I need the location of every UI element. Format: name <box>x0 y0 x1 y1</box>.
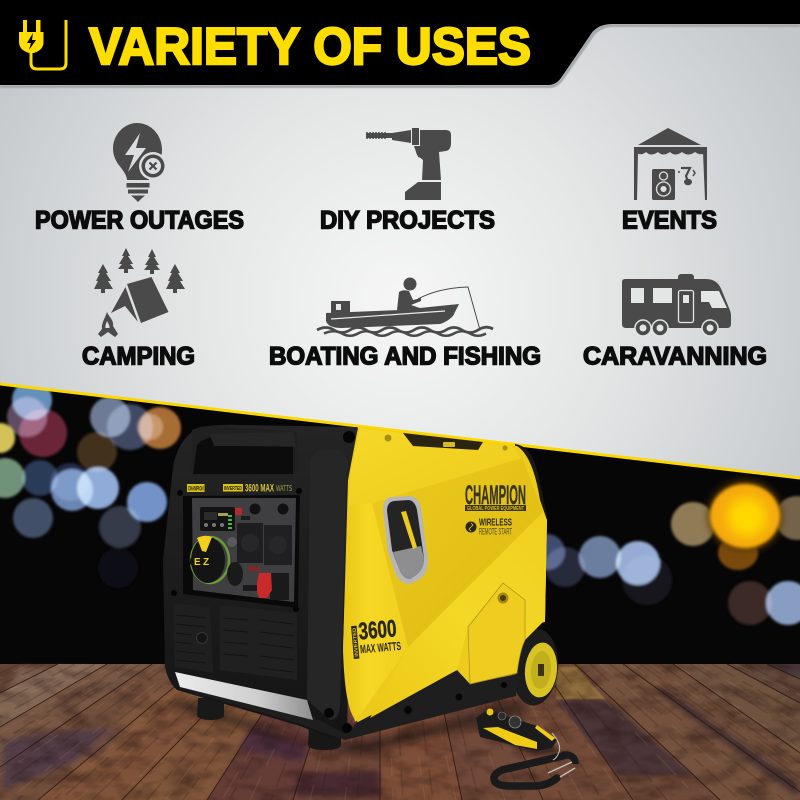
label: boating and fishing: BOATING AND FISHING <box>269 342 541 370</box>
black end housing <box>163 425 357 738</box>
silver strip <box>175 672 313 720</box>
black header banner <box>0 0 800 85</box>
wood floor <box>0 664 800 800</box>
use: power outages <box>35 123 244 234</box>
use: camping <box>82 248 195 370</box>
brand logo <box>465 480 526 512</box>
bokeh lights right <box>529 481 800 625</box>
control panel label strip: CHAMPION <box>188 486 204 492</box>
icon: light bulb with x <box>113 123 167 202</box>
feet <box>197 698 341 750</box>
side pillar <box>307 450 347 720</box>
contact shadow <box>170 695 530 756</box>
generator <box>163 425 561 756</box>
wireless badge: WIRELESS <box>479 516 512 528</box>
3600 max watts badge: MAX WATTS <box>360 639 402 656</box>
wireless remote <box>475 708 575 786</box>
remote body <box>476 708 557 751</box>
yellow body <box>343 427 547 722</box>
control panel label strip: 3600 MAX <box>245 482 274 494</box>
label: power outages: POWER OUTAGES <box>35 206 244 234</box>
access door <box>468 583 525 684</box>
icon: tent, trees and campfire <box>94 248 185 337</box>
wood grain <box>0 664 800 800</box>
base screws <box>404 682 507 714</box>
label: events: EVENTS <box>622 206 717 234</box>
3600 max watts badge <box>350 615 402 659</box>
icon: plug <box>19 20 66 69</box>
use: boating and fishing <box>269 278 541 370</box>
control panel label strip: WATTS <box>276 484 292 493</box>
remote shadow <box>475 730 560 756</box>
bokeh lights left <box>0 380 181 588</box>
icon: canopy with speaker <box>634 128 707 200</box>
icon: drill <box>366 128 451 200</box>
icon: fisherman in boat <box>317 278 493 336</box>
dark night backdrop <box>0 380 800 670</box>
lower vents <box>173 603 297 680</box>
side carry handle <box>383 496 428 584</box>
generator: CHAMPION <box>465 480 526 510</box>
rear wheel <box>509 627 561 707</box>
use: events <box>622 128 717 234</box>
label: DIY projects: DIY PROJECTS <box>320 206 495 234</box>
yellow diagonal edge <box>0 384 800 478</box>
top slot <box>403 433 483 450</box>
screws <box>171 431 355 733</box>
control panel label strip: INVERTED <box>224 486 242 492</box>
rear dark panel top <box>515 444 548 520</box>
wireless badge <box>466 516 512 536</box>
generator: REMOTE START <box>479 526 512 536</box>
control panel recess <box>183 495 300 608</box>
label: camping: CAMPING <box>82 342 195 370</box>
label: caravanning: CARAVANNING <box>583 342 767 370</box>
3600 max watts badge: 3600 <box>357 615 398 645</box>
carabiner <box>494 733 575 786</box>
handle <box>191 426 297 476</box>
floor stains <box>3 668 797 797</box>
icon: motorhome <box>622 274 731 336</box>
header shadow <box>0 24 800 88</box>
control panel: E <box>194 557 201 568</box>
control panel <box>190 498 296 602</box>
3600 max watts badge: INVERTED <box>352 627 360 657</box>
control panel: Z <box>203 557 209 568</box>
brand logo: GLOBAL POWER EQUIPMENT <box>467 506 524 512</box>
use: caravanning <box>583 274 767 370</box>
control panel label strip <box>187 482 292 494</box>
title: VARIETY OF USES <box>89 18 531 76</box>
light grey panel <box>0 0 800 477</box>
base strip <box>178 669 518 740</box>
use: DIY projects <box>320 128 495 234</box>
